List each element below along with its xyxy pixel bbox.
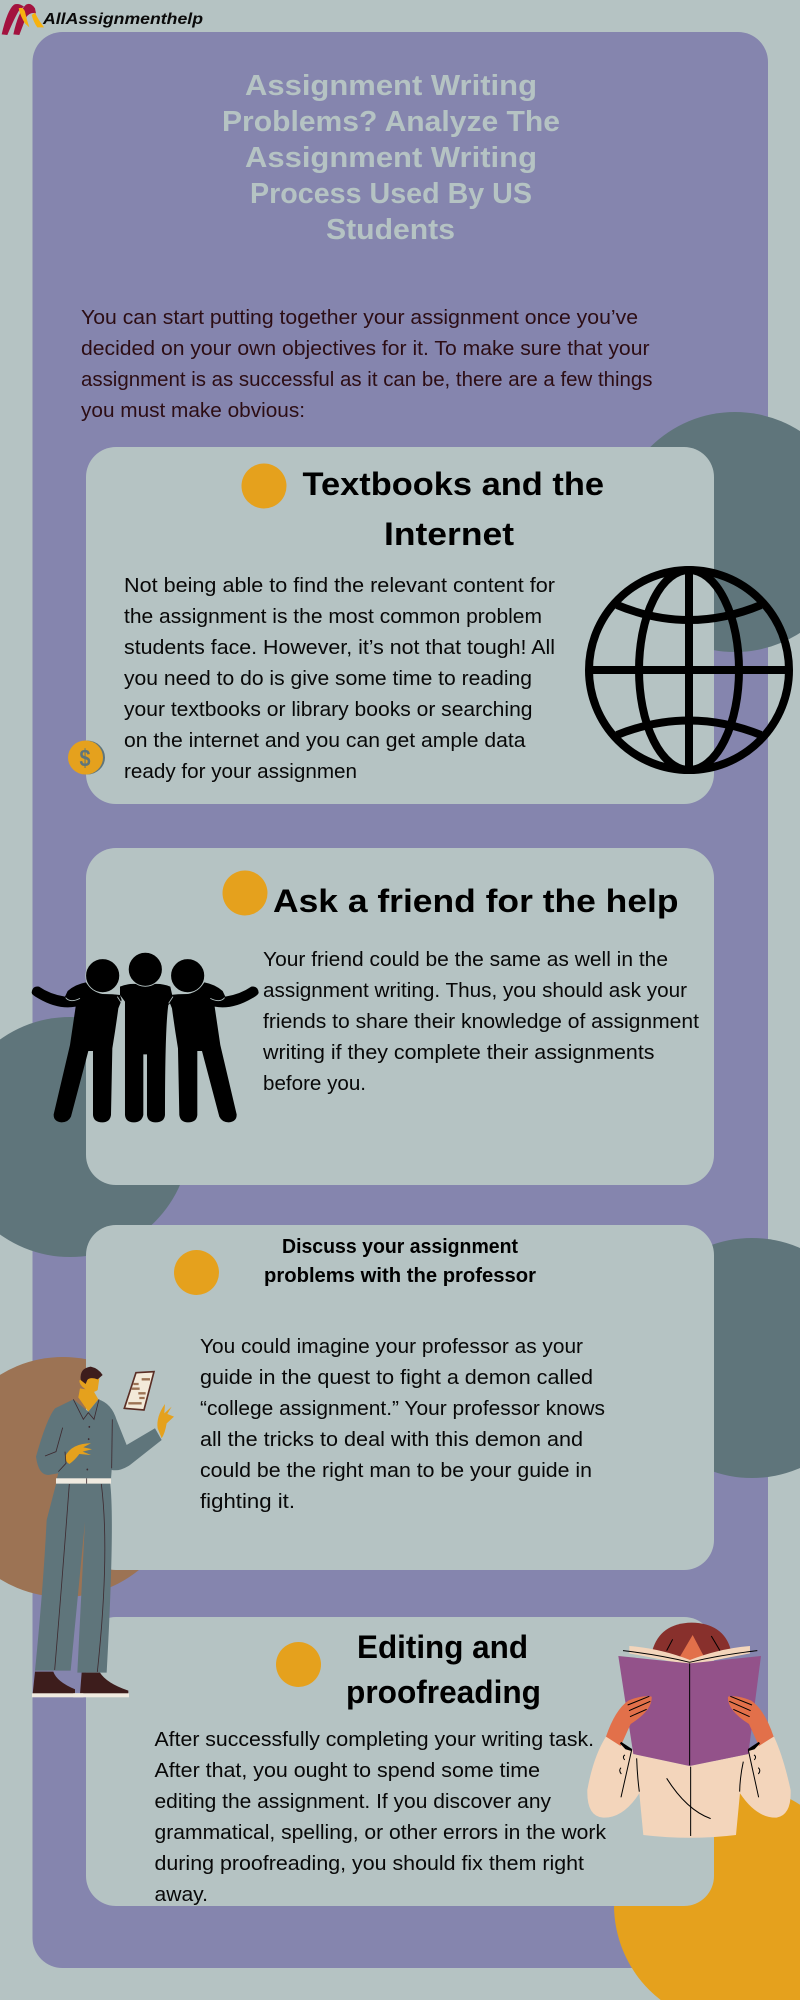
icon: dollar coin: $ xyxy=(80,745,91,772)
body text: ready for your assignmen xyxy=(124,760,357,783)
body text: “college assignment.” Your professor knows xyxy=(200,1397,605,1420)
body text: You could imagine your professor as your xyxy=(200,1335,583,1358)
body text xyxy=(154,1728,607,1906)
logo wordmark: AllAssignmenthelp xyxy=(42,11,203,28)
body text: Your friend could be the same as well in the xyxy=(263,948,668,971)
body text: all the tricks to deal with this demon and xyxy=(200,1428,583,1451)
heading: Editing and xyxy=(357,1629,528,1665)
title: Assignment Writing xyxy=(245,142,537,174)
body text: away. xyxy=(154,1883,208,1906)
body text: After that, you ought to spend some time xyxy=(154,1759,540,1782)
title: Problems? Analyze The xyxy=(222,106,560,138)
decorative circle: teal top right xyxy=(615,412,800,652)
icon: dollar coin xyxy=(68,740,105,774)
decorative circle: brown left xyxy=(0,1357,183,1597)
body text: on the internet and you can get ample data xyxy=(124,729,526,752)
panel: ask a friend xyxy=(86,848,714,1185)
body text: the assignment is the most common problem xyxy=(124,605,542,628)
heading: Textbooks and the xyxy=(302,466,604,502)
body text: assignment writing. Thus, you should ask your xyxy=(263,979,687,1002)
illustration: woman reading a book xyxy=(587,1623,791,1838)
body text: After successfully completing your writing task. xyxy=(154,1728,594,1751)
body text: friends to share their knowledge of assignment xyxy=(263,1010,699,1033)
icon: three friends silhouette xyxy=(32,952,259,1122)
heading: proofreading xyxy=(346,1674,541,1710)
body text: you need to do is give some time to reading xyxy=(124,667,532,690)
decorative circle: teal right xyxy=(632,1238,800,1478)
logo xyxy=(2,4,203,35)
body text: Not being able to find the relevant content for xyxy=(124,574,555,597)
book cover xyxy=(618,1656,761,1766)
heading xyxy=(264,1236,536,1287)
body text: during proofreading, you should fix them right xyxy=(154,1852,584,1875)
body text: editing the assignment. If you discover any xyxy=(154,1790,552,1813)
title: Students xyxy=(326,214,455,246)
title: Process Used By US xyxy=(250,178,532,210)
body text: fighting it. xyxy=(200,1490,295,1513)
bullet dot xyxy=(222,870,268,916)
title xyxy=(222,70,560,246)
logo mark xyxy=(2,4,44,35)
body text: your textbooks or library books or searching xyxy=(124,698,532,721)
body text xyxy=(124,574,555,783)
intro text: You can start putting together your assignment once you’ve xyxy=(81,306,638,329)
panel: discuss with the professor xyxy=(86,1225,714,1570)
hair xyxy=(652,1623,731,1663)
title: Assignment Writing xyxy=(245,70,537,102)
body text: could be the right man to be your guide in xyxy=(200,1459,592,1482)
body text xyxy=(262,948,699,1095)
heading xyxy=(346,1629,541,1710)
panel: editing and proofreading xyxy=(86,1617,714,1906)
body text: before you. xyxy=(263,1072,366,1095)
heading: problems with the professor xyxy=(264,1265,536,1287)
bullet dot xyxy=(276,1642,321,1687)
heading xyxy=(302,466,604,552)
icon: globe xyxy=(589,570,789,770)
body text: guide in the quest to fight a demon called xyxy=(200,1366,593,1389)
bullet dot xyxy=(242,464,286,508)
decorative circle: teal left xyxy=(0,1017,190,1257)
heading: Ask a friend for the help xyxy=(273,883,678,919)
intro text: you must make obvious: xyxy=(81,399,305,422)
heading: Internet xyxy=(384,516,514,552)
decorative circle: orange bottom right xyxy=(614,1785,800,2000)
intro text xyxy=(81,306,652,422)
body xyxy=(633,1754,748,1838)
bullet dot xyxy=(174,1250,219,1295)
intro text: decided on your own objectives for it. To make sure that your xyxy=(81,337,650,360)
body text: grammatical, spelling, or other errors in the work xyxy=(154,1821,607,1844)
illustration: man holding a phone xyxy=(32,1367,174,1697)
body text: writing if they complete their assignments xyxy=(262,1041,654,1064)
heading: Discuss your assignment xyxy=(282,1236,518,1258)
hands xyxy=(606,1696,652,1746)
body text xyxy=(200,1335,605,1513)
intro text: assignment is as successful as it can be, there are a few things xyxy=(81,368,652,391)
panel: textbooks and the internet xyxy=(86,447,714,804)
body text: students face. However, it’s not that tough! All xyxy=(124,636,555,659)
